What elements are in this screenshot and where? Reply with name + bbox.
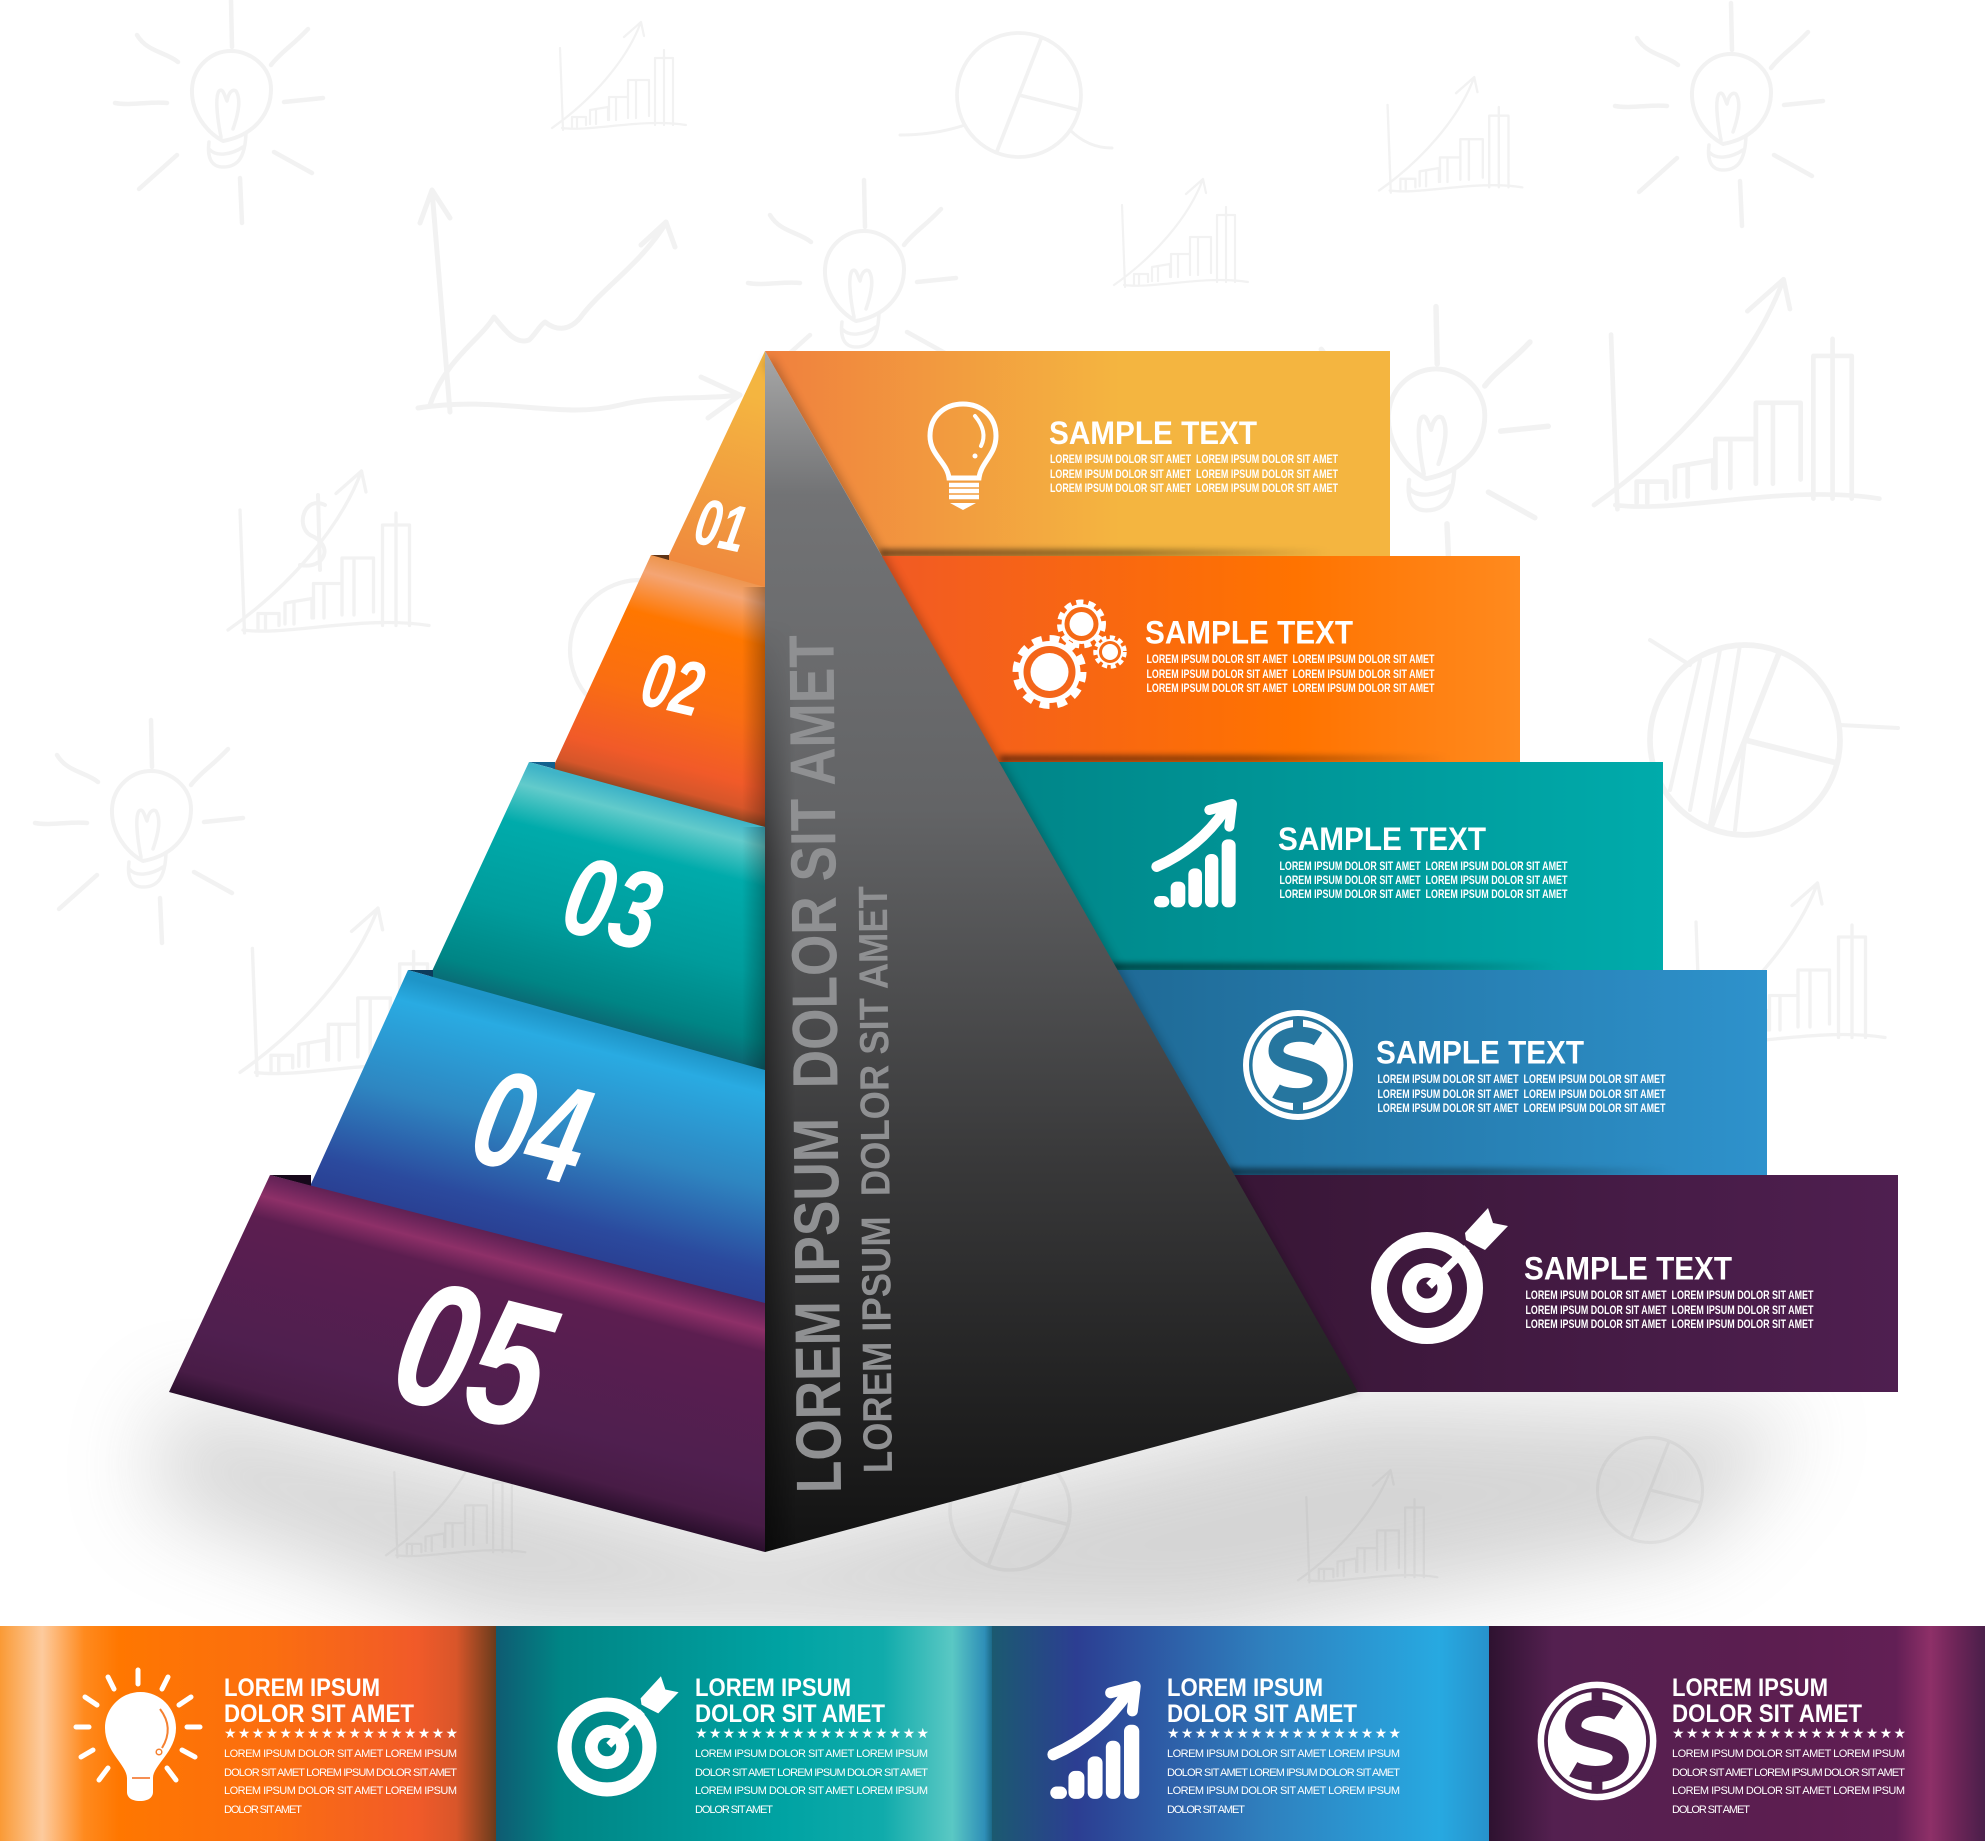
heading and text: LOREM IPSUM DOLOR SIT AMET: [1292, 669, 1434, 681]
text: LOREM IPSUM DOLOR SIT AMET LOREM IPSUM: [695, 1748, 928, 1760]
text: DOLOR SIT AMET LOREM IPSUM DOLOR SIT AMET: [1167, 1767, 1400, 1779]
heading and text: LOREM IPSUM DOLOR SIT AMET: [1672, 1305, 1814, 1317]
icon: growth chart: [1154, 804, 1236, 907]
sketch: money chart left: [228, 471, 429, 633]
text: DOLOR SIT AMET: [1167, 1804, 1245, 1816]
sketch: light bulb centre: [748, 180, 956, 403]
text: LOREM IPSUM: [224, 1674, 380, 1702]
text: DOLOR SIT AMET LOREM IPSUM DOLOR SIT AMET: [224, 1767, 457, 1779]
text: DOLOR SIT AMET: [1672, 1700, 1862, 1728]
heading and text: LOREM IPSUM DOLOR SIT AMET: [1524, 1074, 1666, 1086]
heading and text: [1145, 614, 1434, 695]
heading and text: LOREM IPSUM DOLOR SIT AMET: [1280, 861, 1420, 873]
sketch: light bulb behind panel: [1294, 307, 1548, 579]
heading and text: SAMPLE TEXT: [1145, 614, 1353, 650]
heading and text: LOREM IPSUM DOLOR SIT AMET: [1196, 483, 1338, 495]
heading and text: LOREM IPSUM DOLOR SIT AMET: [1524, 1103, 1666, 1115]
step 04: [300, 970, 765, 1330]
step 03: 03: [552, 831, 673, 975]
sketch: chart lower left: [240, 908, 448, 1076]
step 02: [545, 555, 765, 850]
text: [695, 1674, 929, 1816]
band section: blue: [992, 1626, 1489, 1841]
heading and text: LOREM IPSUM DOLOR SIT AMET: [1378, 1089, 1518, 1101]
heading and text: LOREM IPSUM DOLOR SIT AMET: [1146, 669, 1288, 681]
sketch: light bulb top left: [115, 0, 323, 223]
heading and text: LOREM IPSUM DOLOR SIT AMET: [1526, 1305, 1666, 1317]
text: ★★★★★★★★★★★★★★★★★: [1672, 1726, 1906, 1742]
sketch: pie bottom centre: [950, 1450, 1070, 1570]
step 01: [655, 351, 765, 600]
text: DOLOR SIT AMET: [224, 1700, 414, 1728]
heading and text: LOREM IPSUM DOLOR SIT AMET: [1292, 683, 1434, 695]
step 01: 01: [689, 484, 753, 566]
dark pyramid face: [765, 351, 1358, 1552]
heading and text: LOREM IPSUM DOLOR SIT AMET: [1426, 875, 1568, 887]
heading and text: SAMPLE TEXT: [1376, 1034, 1584, 1070]
sketch: chart bottom left: [386, 1445, 525, 1557]
icon: target: [565, 1676, 679, 1789]
text: LOREM IPSUM DOLOR SIT AMET LOREM IPSUM: [224, 1748, 457, 1760]
sketch: pie top: [900, 33, 1112, 157]
text: DOLOR SIT AMET: [695, 1804, 773, 1816]
text: DOLOR SIT AMET LOREM IPSUM DOLOR SIT AMET: [695, 1767, 928, 1779]
sketch: pie bottom right: [1598, 1438, 1702, 1542]
text: LOREM IPSUM DOLOR SIT AMET LOREM IPSUM: [695, 1785, 928, 1797]
heading and text: LOREM IPSUM DOLOR SIT AMET: [1526, 1290, 1666, 1302]
icon: light bulb outline: [930, 404, 996, 510]
heading and text: LOREM IPSUM DOLOR SIT AMET: [1196, 454, 1338, 466]
heading and text: LOREM IPSUM DOLOR SIT AMET: [1050, 483, 1191, 495]
heading and text: LOREM IPSUM DOLOR SIT AMET: [1378, 1103, 1518, 1115]
heading and text: LOREM IPSUM DOLOR SIT AMET: [1146, 654, 1288, 666]
heading and text: LOREM IPSUM DOLOR SIT AMET: [1524, 1089, 1666, 1101]
band section: purple: [1489, 1626, 1985, 1841]
text: LOREM IPSUM: [1167, 1674, 1323, 1702]
sketch: growth chart upper right: [1379, 77, 1522, 193]
step 03: [425, 762, 765, 1095]
heading and text: LOREM IPSUM DOLOR SIT AMET: [1426, 861, 1568, 873]
heading and text: [1524, 1250, 1814, 1331]
heading and text: LOREM IPSUM DOLOR SIT AMET: [1426, 889, 1568, 901]
sketch: chart right: [1684, 883, 1885, 1045]
heading and text: LOREM IPSUM DOLOR SIT AMET: [1378, 1074, 1518, 1086]
icon: gears: [1017, 602, 1124, 704]
heading and text: LOREM IPSUM DOLOR SIT AMET: [1292, 654, 1434, 666]
heading and text: LOREM IPSUM DOLOR SIT AMET: [1196, 469, 1338, 481]
text: DOLOR SIT AMET: [224, 1804, 302, 1816]
vertical large text: LOREM IPSUM DOLOR SIT AMET: [776, 635, 855, 1494]
heading and text: LOREM IPSUM DOLOR SIT AMET: [1280, 889, 1420, 901]
step 05: 05: [377, 1240, 573, 1470]
text: LOREM IPSUM DOLOR SIT AMET LOREM IPSUM: [224, 1785, 457, 1797]
heading and text: SAMPLE TEXT: [1049, 415, 1257, 451]
text: LOREM IPSUM DOLOR SIT AMET LOREM IPSUM: [1167, 1748, 1400, 1760]
text: LOREM IPSUM: [1672, 1674, 1828, 1702]
sketch: chart bottom right: [1298, 1470, 1437, 1582]
heading and text: LOREM IPSUM DOLOR SIT AMET: [1050, 469, 1191, 481]
text: DOLOR SIT AMET: [695, 1700, 885, 1728]
text: ★★★★★★★★★★★★★★★★★: [224, 1726, 458, 1742]
heading and text: LOREM IPSUM DOLOR SIT AMET: [1146, 683, 1288, 695]
step 04: 04: [459, 1039, 604, 1215]
text: DOLOR SIT AMET: [1167, 1700, 1357, 1728]
heading and text: LOREM IPSUM DOLOR SIT AMET: [1526, 1319, 1666, 1331]
sketch: light bulb top right: [1615, 3, 1823, 226]
step 05: [169, 1175, 765, 1552]
text: [224, 1674, 458, 1816]
step 02: 02: [634, 636, 712, 734]
bottom band: [0, 1626, 1985, 1841]
text: LOREM IPSUM DOLOR SIT AMET LOREM IPSUM: [1672, 1748, 1905, 1760]
heading and text: SAMPLE TEXT: [1278, 821, 1486, 857]
heading and text: LOREM IPSUM DOLOR SIT AMET: [1672, 1319, 1814, 1331]
heading and text: [1376, 1034, 1666, 1115]
sketch: big line chart: [418, 190, 740, 418]
text: [1167, 1674, 1401, 1816]
text: DOLOR SIT AMET LOREM IPSUM DOLOR SIT AMET: [1672, 1767, 1905, 1779]
text: ★★★★★★★★★★★★★★★★★: [695, 1726, 929, 1742]
sketch: pie behind step 02: [570, 580, 710, 720]
text: LOREM IPSUM DOLOR SIT AMET LOREM IPSUM: [1672, 1785, 1905, 1797]
heading and text: LOREM IPSUM DOLOR SIT AMET: [1280, 875, 1420, 887]
heading and text: LOREM IPSUM DOLOR SIT AMET: [1672, 1290, 1814, 1302]
sketch: growth chart upper centre: [1114, 179, 1248, 287]
heading and text: SAMPLE TEXT: [1524, 1250, 1732, 1286]
panel 2: orange: [870, 556, 1520, 763]
sketch: growth chart top: [552, 22, 686, 130]
icon: glowing bulb: [76, 1670, 200, 1801]
text: LOREM IPSUM: [695, 1674, 851, 1702]
edge shadow of dark face: [768, 360, 1355, 1392]
heading and text: [1278, 821, 1568, 901]
panel 3: teal: [990, 762, 1663, 971]
ground shadow: [150, 1400, 1800, 1640]
icon: dollar coin: [1538, 1682, 1656, 1800]
text: LOREM IPSUM DOLOR SIT AMET LOREM IPSUM: [1167, 1785, 1400, 1797]
icon: target and arrow: [1379, 1208, 1508, 1336]
sketch: growth chart large right: [1594, 279, 1879, 509]
vertical small text: LOREM IPSUM DOLOR SIT AMET: [850, 886, 901, 1473]
icon: dollar coin: [1243, 1010, 1353, 1120]
text: [1672, 1674, 1906, 1816]
sketch: hatched pie right: [1650, 640, 1898, 835]
band section: orange: [0, 1626, 496, 1841]
band section: teal: [496, 1626, 992, 1841]
sketch: light bulb left: [35, 720, 243, 943]
text: ★★★★★★★★★★★★★★★★★: [1167, 1726, 1401, 1742]
heading and text: LOREM IPSUM DOLOR SIT AMET: [1050, 454, 1191, 466]
heading and text: [1049, 415, 1338, 495]
pyramid left side steps: [169, 351, 765, 1552]
panel 4: blue: [1110, 970, 1767, 1176]
icon: growth chart: [1050, 1686, 1139, 1799]
text: DOLOR SIT AMET: [1672, 1804, 1750, 1816]
panel 5: purple: [1225, 1175, 1898, 1392]
panel 1: yellow: [765, 351, 1390, 557]
